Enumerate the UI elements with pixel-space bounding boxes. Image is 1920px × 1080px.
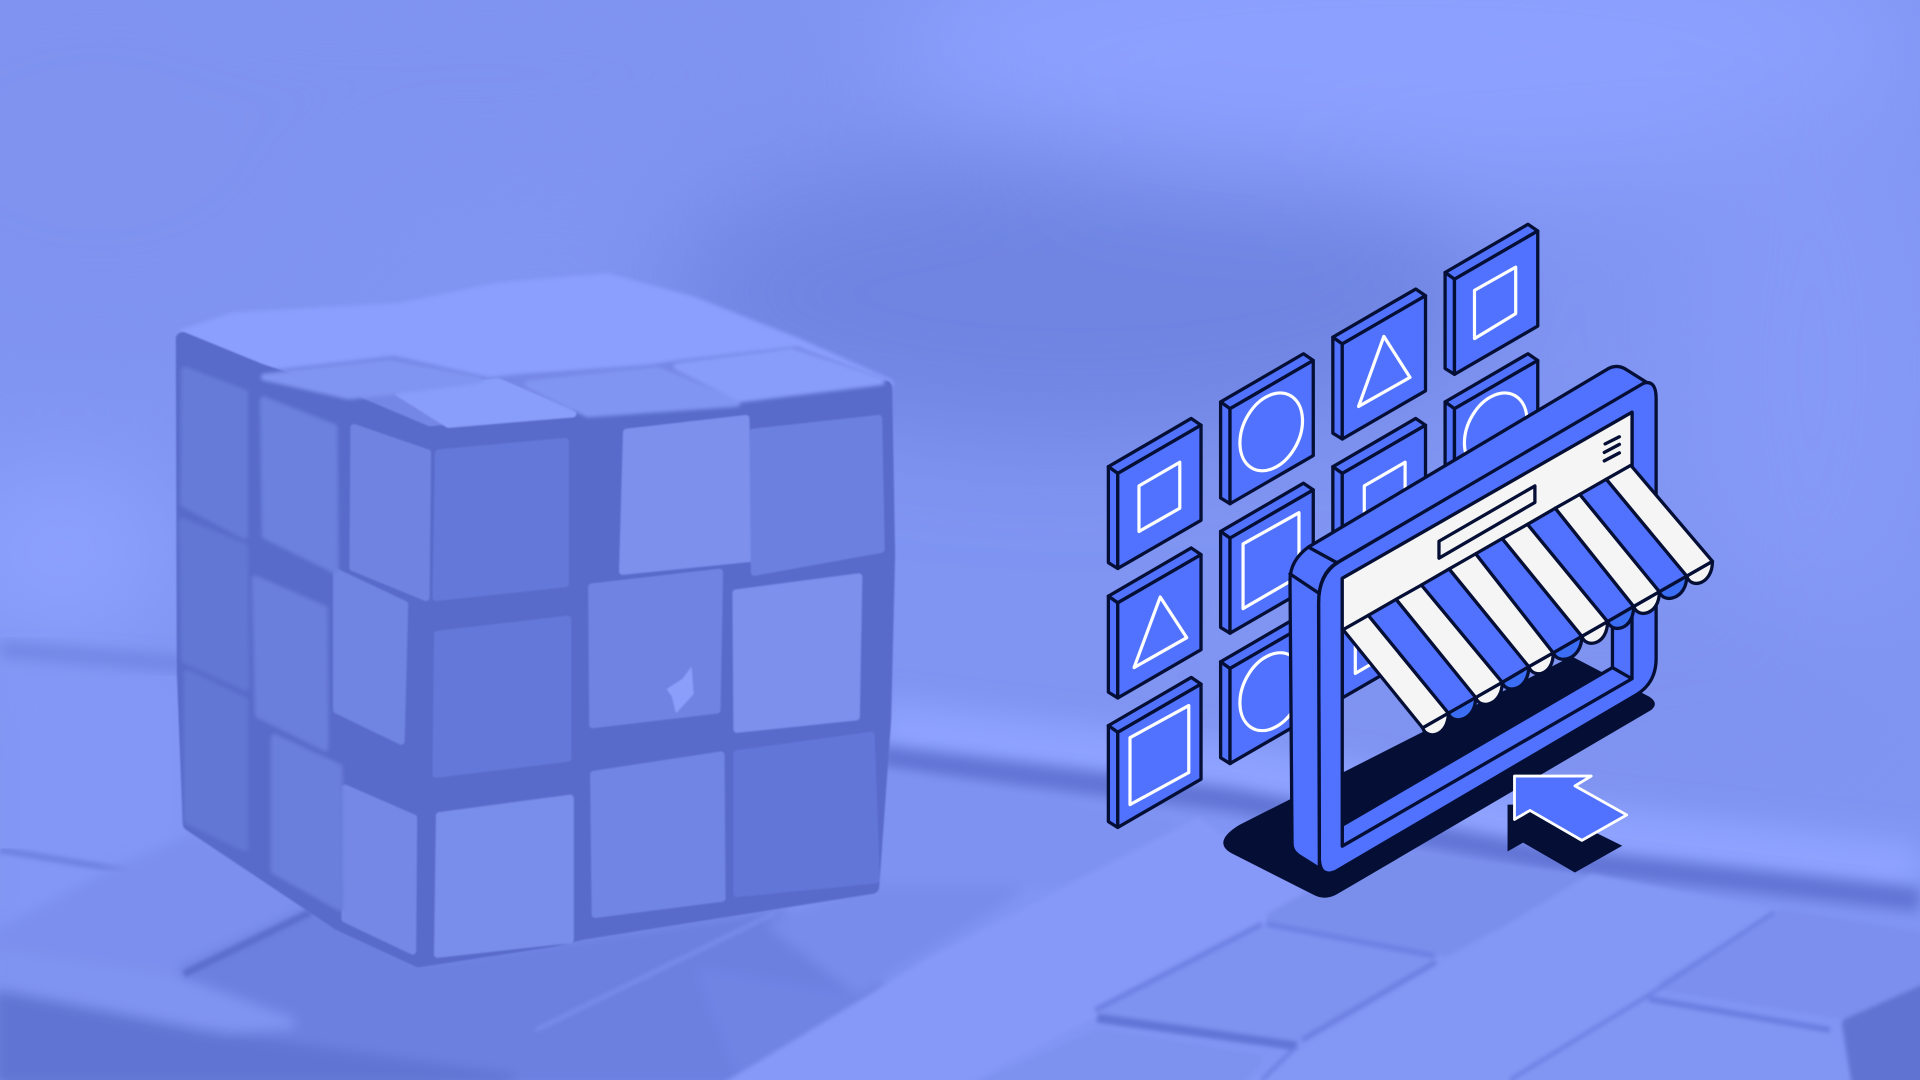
product tile: triangle, upper (1333, 289, 1426, 439)
cursor arrow shadow (1508, 805, 1622, 873)
website header bar (1342, 412, 1632, 631)
cube stickers: blurred far columns and rear top (182, 352, 881, 907)
cube body (183, 339, 888, 960)
search field (1439, 486, 1535, 558)
product tile: large square (1108, 677, 1201, 827)
cube top frame (254, 350, 891, 441)
table: soft horizon bands (0, 649, 1920, 1080)
table: soft blocks left of the plank (0, 856, 1000, 1080)
product tile: circle, lower (1221, 614, 1315, 764)
storefront frame (1290, 366, 1656, 873)
product tile: circle (1221, 354, 1315, 504)
menu icon (1604, 437, 1619, 461)
product tile: large square, third column (1333, 548, 1426, 698)
product tile: triangle (1108, 548, 1201, 698)
cube top face (185, 278, 889, 437)
striped awning (1343, 465, 1712, 735)
table: wooden blocks under the storefront (182, 874, 1920, 1080)
product tile: small square, third column (1333, 418, 1426, 568)
product tile: small square (1108, 418, 1201, 568)
cursor arrow (1514, 776, 1627, 840)
product tile: small square, top right (1445, 224, 1538, 374)
product tile: circle, right column (1445, 354, 1540, 504)
base shadow (1223, 656, 1655, 898)
rubik's cube photo (182, 278, 891, 960)
illustration: online storefront with product tiles (1108, 224, 1712, 898)
product tile: large square, middle column (1221, 483, 1313, 633)
cube stickers (337, 382, 881, 954)
